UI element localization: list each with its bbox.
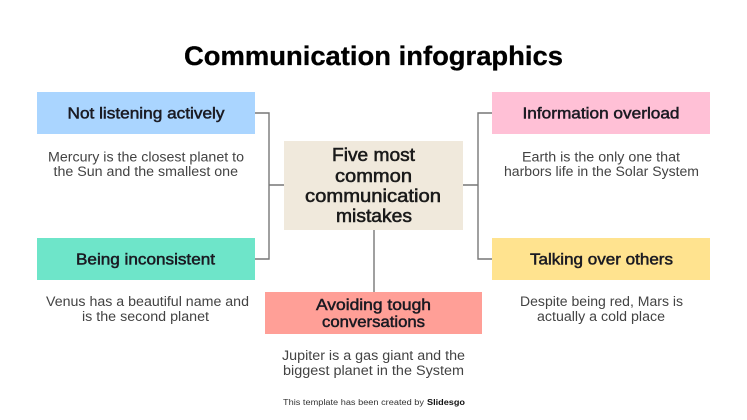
panel: avoiding tough conversations: Jupiter is a gas giant and the [282,348,465,363]
panel: information overload: Earth is the only one that [522,150,680,164]
connector: centre to bottom [373,230,375,292]
panel: avoiding tough conversations [265,292,482,378]
panel: being inconsistent: Being inconsistent [76,252,216,268]
panel: talking over others: Talking over others [530,252,673,268]
panel: not listening actively: the Sun and the smallest one [54,164,238,179]
panel: information overload [492,92,710,179]
panel: being inconsistent: is the second planet [82,309,209,324]
panel: being inconsistent: Venus has a beautiful name and [46,294,249,309]
panel: talking over others: actually a cold place [537,309,665,324]
connector: left bracket [255,113,284,259]
panel: avoiding tough conversations: conversations [322,314,425,331]
panel: information overload: harbors life in the Solar System [504,164,699,179]
footer credit [283,398,465,407]
panel: not listening actively: Mercury is the closest planet to [48,150,244,164]
footer credit: This template has been created by [283,398,424,407]
panel: information overload: Information overload [522,106,680,122]
title: Communication infographics [184,41,563,71]
panel: centre topic [284,141,463,230]
panel: avoiding tough conversations: biggest planet in the System [283,363,464,378]
panel: centre topic: common [335,166,412,186]
panel: not listening actively: Not listening actively [68,106,224,122]
footer credit: Slidesgo [427,398,465,407]
panel: avoiding tough conversations: Avoiding tough [316,297,431,314]
panel: centre topic: mistakes [336,206,412,226]
panel: being inconsistent [37,238,255,324]
panel: not listening actively [37,92,255,179]
panel: centre topic: communication [305,186,441,206]
panel: centre topic: Five most [332,145,415,165]
connector: right bracket [463,113,492,259]
panel: talking over others: Despite being red, Mars is [520,294,683,309]
panel: talking over others [492,238,710,324]
